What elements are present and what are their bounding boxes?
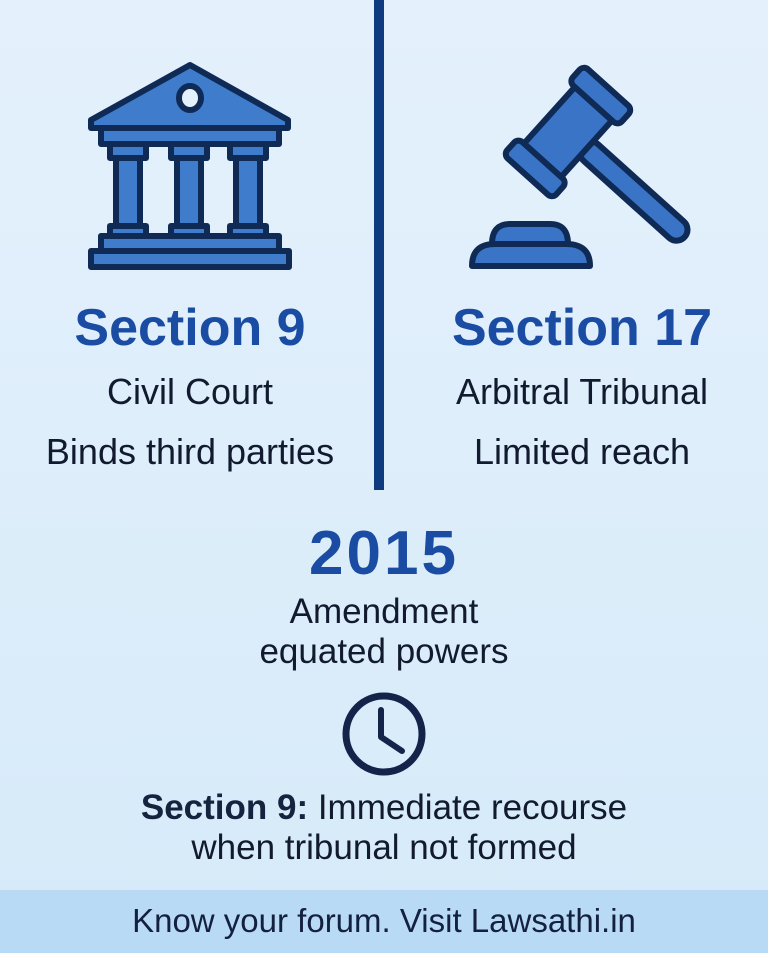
divider	[374, 0, 384, 490]
icon: clock	[342, 692, 426, 776]
heading: 2015: 2015	[309, 519, 459, 588]
text: amendment	[259, 592, 509, 671]
icon: gavel	[469, 64, 690, 269]
text: Civil Court: Civil Court	[107, 371, 273, 412]
text: Section 9 immediate recourse: when tribunal not formed	[191, 828, 577, 867]
heading: Section 17: Section 17	[452, 299, 712, 357]
text: Limited reach: Limited reach	[474, 431, 690, 472]
footer text: Know your forum. Visit Lawsathi.in	[132, 902, 636, 939]
footer	[0, 890, 768, 953]
icon: courthouse	[88, 62, 292, 270]
text: Section 9 immediate recourse	[141, 788, 627, 867]
text: amendment: Amendment	[290, 592, 478, 631]
text: amendment: equated powers	[259, 632, 509, 671]
text: Binds third parties: Binds third parties	[46, 431, 334, 472]
heading: Section 9: Section 9	[74, 299, 306, 357]
text: Section 9 immediate recourse: Section 9: Immediate recourse	[141, 788, 627, 827]
text: Arbitral Tribunal: Arbitral Tribunal	[456, 371, 708, 412]
